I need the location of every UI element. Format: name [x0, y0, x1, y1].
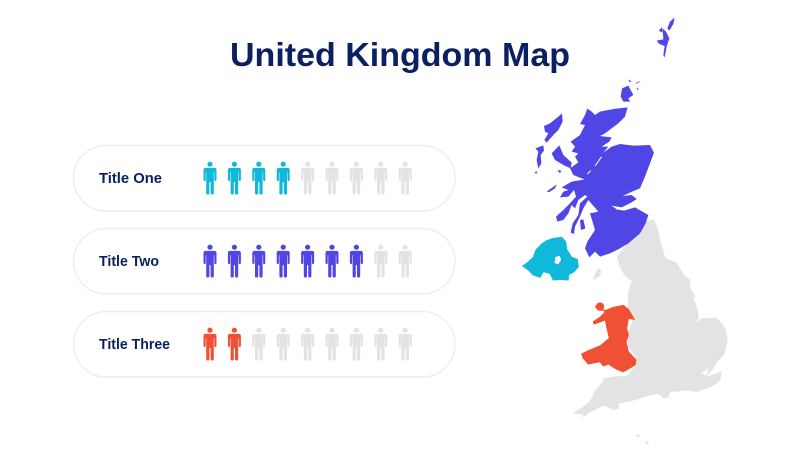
icon row: 7 of 9 purple [204, 245, 412, 278]
panel: title one [74, 146, 455, 211]
label: title one: Title One [99, 170, 162, 187]
label: title two: Title Two [99, 253, 159, 270]
icon row: 2 of 9 red [204, 328, 412, 360]
map: United Kingdom [535, 17, 727, 444]
panel: title two [74, 228, 455, 294]
region: Wales [582, 303, 636, 372]
label: title three: Title Three [99, 336, 170, 353]
region: Scotland [535, 17, 675, 257]
panel: title three [74, 312, 455, 377]
region: England [574, 220, 727, 444]
icon row: 4 of 9 teal [204, 162, 412, 194]
region: Northern Ireland [523, 237, 578, 280]
title: United Kingdom Map [230, 36, 570, 73]
